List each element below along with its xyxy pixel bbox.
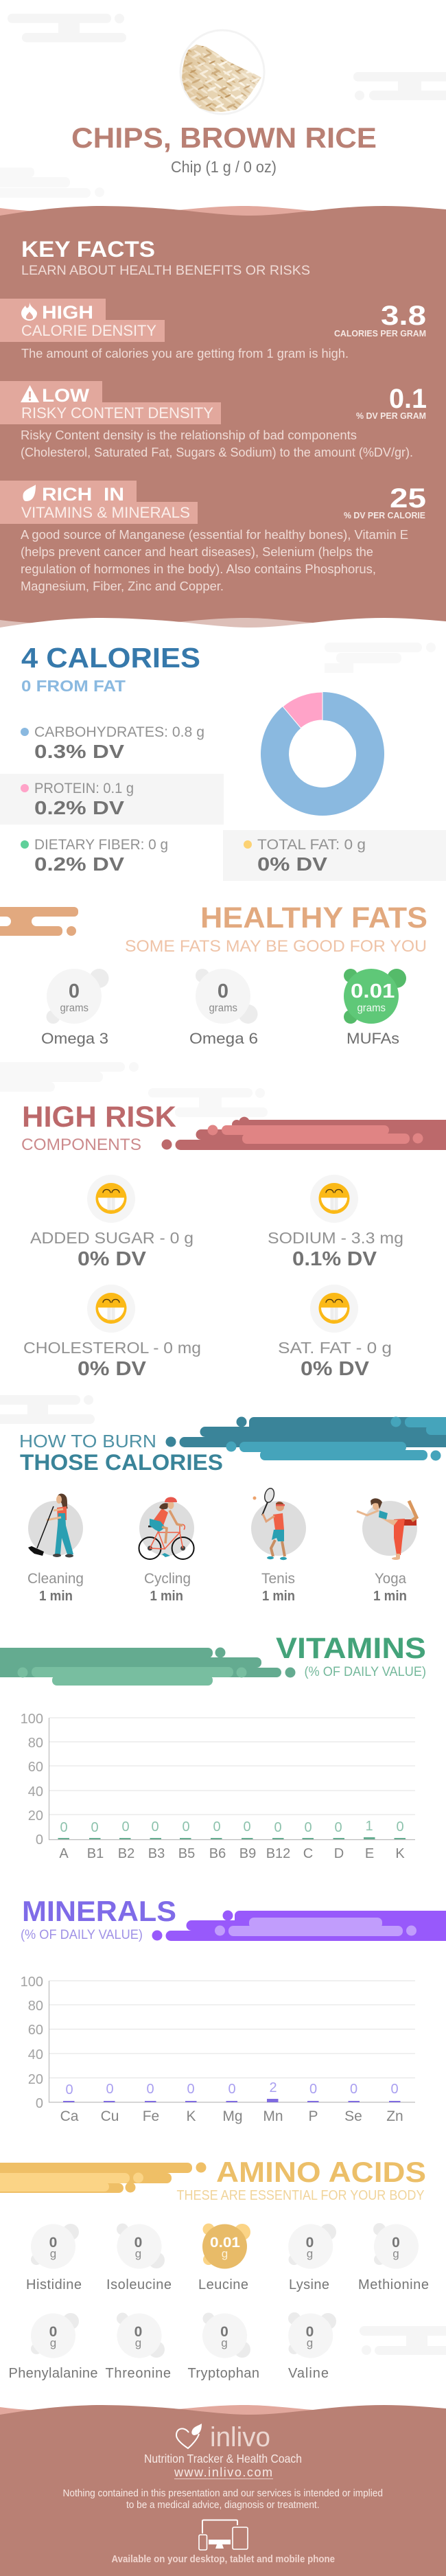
chart: minerals bar chart: Ca	[60, 2108, 79, 2124]
subheading: vitamins: (% OF DAILY VALUE)	[305, 1665, 426, 1679]
background cloud: top left	[8, 14, 126, 43]
icon: person playing tennis	[253, 1487, 287, 1560]
heading: amino acids: AMINO ACIDS	[216, 2156, 426, 2188]
background cloud: left of subtitle	[0, 168, 104, 198]
amino: valine: Valine	[288, 2366, 329, 2381]
amino: phenylalanine	[8, 2313, 97, 2381]
chart: minerals bar chart: 0	[228, 2082, 236, 2097]
amino: lysine: Lysine	[289, 2277, 329, 2292]
subheading: minerals: (% OF DAILY VALUE)	[21, 1928, 143, 1942]
icon: desktop, tablet and phone	[199, 2520, 248, 2550]
banner: healthy fats	[0, 907, 89, 936]
amino: threonine: 0	[134, 2324, 142, 2340]
chart: vitamins bar chart: 0	[213, 1819, 221, 1835]
stat: MUFAs	[344, 969, 406, 1047]
chart: vitamins bar chart: 0	[334, 1820, 342, 1835]
amino: isoleucine: Isoleucine	[106, 2277, 172, 2292]
chart: vitamins bar chart: K	[395, 1846, 405, 1861]
chart: vitamins bar chart: 0	[121, 1819, 130, 1835]
chart: vitamins bar chart: 1	[365, 1819, 373, 1834]
chart: minerals bar chart: 80	[28, 1999, 43, 2014]
legend: carbohydrates: 0.3% DV	[34, 741, 124, 762]
fact: rich in vitamins and minerals: A good source of Manganese (essential for healthy bones), Vitamin E	[21, 528, 408, 542]
stat: omega 6: grams	[209, 1002, 237, 1014]
amino: phenylalanine: Phenylalanine	[8, 2366, 97, 2381]
legend: protein: PROTEIN: 0.1 g	[34, 781, 134, 796]
amino: leucine: Leucine	[198, 2277, 248, 2292]
amino: valine: g	[307, 2336, 313, 2349]
fact: risky content density	[0, 381, 427, 459]
amino: tryptophan: g	[221, 2336, 228, 2349]
chart: minerals bar chart: Se	[344, 2108, 362, 2124]
chart: minerals bar chart: 0	[106, 2082, 114, 2097]
panel: footer background	[0, 2405, 446, 2576]
legend: carbohydrates	[21, 724, 204, 762]
amino: leucine: 0.01	[210, 2235, 240, 2251]
chart: minerals bar chart: Mn	[263, 2108, 283, 2124]
amino: threonine: g	[135, 2336, 141, 2349]
legend: dietary fiber: 0.2% DV	[34, 853, 124, 875]
chart: vitamins bar chart: D	[334, 1846, 344, 1861]
icon: grinning face	[318, 1183, 350, 1214]
stat: MUFAs: 0.01	[351, 980, 395, 1002]
icon: grinning face	[96, 1183, 126, 1214]
food photo: brown rice	[180, 30, 264, 114]
chart: vitamins bar chart: 0	[396, 1819, 404, 1835]
chart: minerals bar chart: 0	[309, 2082, 317, 2097]
legend panels	[0, 774, 446, 881]
amino: methionine	[358, 2223, 429, 2292]
heading: calories: 4 CALORIES	[21, 642, 200, 674]
amino: threonine: Threonine	[106, 2366, 171, 2381]
disclaimer: to be a medical advice, diagnosis or treatment.	[126, 2500, 320, 2511]
amino: lysine: 0	[306, 2235, 314, 2251]
heading: how to burn: HOW TO BURN	[19, 1431, 156, 1451]
heading: healthy fats: HEALTHY FATS	[200, 901, 427, 934]
risk item: added sugar: 0% DV	[78, 1248, 147, 1270]
legend: protein	[21, 781, 134, 818]
amino: leucine	[198, 2223, 250, 2292]
icon: grinning face	[318, 1293, 350, 1324]
chart: vitamins bar chart: B6	[209, 1846, 226, 1861]
icon: warning triangle	[21, 385, 39, 402]
activity: yoga	[357, 1498, 417, 1604]
risk item: sodium: 0.1% DV	[292, 1248, 377, 1270]
chart: vitamins bar chart: 0	[91, 1820, 99, 1835]
chart: vitamins bar chart: 0	[182, 1819, 190, 1835]
stat: omega 3: grams	[60, 1002, 89, 1014]
activity: tennis: 1 min	[262, 1589, 295, 1604]
chart: vitamins bar chart: B9	[239, 1846, 256, 1861]
amino: threonine	[106, 2312, 171, 2381]
banner: amino acids	[0, 2163, 206, 2193]
availability note: Available on your desktop, tablet and mobile phone	[111, 2554, 335, 2565]
fact: calorie density: 3.8	[381, 301, 426, 331]
amino: isoleucine: g	[135, 2247, 141, 2260]
activity: cycling	[139, 1497, 194, 1604]
fact: calorie density: CALORIE DENSITY	[21, 322, 156, 339]
chart: vitamins bar chart: 0	[60, 1820, 68, 1835]
banner: minerals	[152, 1910, 446, 1941]
stat: MUFAs: grams	[357, 1002, 386, 1014]
amino: isoleucine	[106, 2223, 172, 2292]
banner: vitamins	[0, 1648, 295, 1686]
chart: vitamins bar chart: 0	[36, 1832, 43, 1848]
legend: dietary fiber: DIETARY FIBER: 0 g	[34, 837, 168, 853]
serving size: Chip (1 g / 0 oz)	[171, 158, 277, 176]
panel: key facts background	[0, 206, 446, 642]
icon: flame	[21, 302, 37, 321]
subheading: components: COMPONENTS	[21, 1136, 141, 1154]
icon: leaf	[23, 485, 36, 501]
legend: protein: 0.2% DV	[34, 797, 124, 818]
heading: high risk: HIGH RISK	[22, 1101, 176, 1134]
chart: vitamins bar chart: B1	[87, 1846, 104, 1861]
amino: lysine	[288, 2224, 336, 2292]
chart: minerals bar chart: 0	[65, 2082, 73, 2097]
activity: tennis: Tenis	[261, 1571, 295, 1587]
fact: calorie density: HIGH	[42, 302, 93, 323]
chart: minerals bar chart: P	[308, 2108, 318, 2124]
amino: histidine: g	[50, 2247, 56, 2260]
chart: minerals bar chart: 0	[187, 2082, 195, 2097]
fact: rich in vitamins and minerals: VITAMINS & MINERALS	[21, 504, 190, 521]
fact: rich in vitamins and minerals: 25	[390, 483, 426, 514]
stat: omega 3: 0	[69, 980, 80, 1002]
legend: total fat	[244, 837, 366, 875]
chart: vitamins bar chart: B2	[118, 1846, 134, 1861]
chart: vitamins bar chart: C	[303, 1846, 313, 1861]
banner: burn calories	[166, 1417, 446, 1461]
activity: yoga: 1 min	[373, 1589, 407, 1604]
amino: methionine: g	[392, 2247, 399, 2260]
website link: www.inlivo.com	[174, 2465, 272, 2479]
title: CHIPS, BROWN RICE	[71, 122, 377, 154]
amino: phenylalanine: 0	[49, 2324, 57, 2340]
fact: risky content density: 0.1	[389, 384, 427, 414]
amino: phenylalanine: g	[50, 2336, 56, 2349]
disclaimer: Nothing contained in this presentation and our services is intended or implied	[63, 2488, 383, 2499]
chart: minerals bar chart: 2	[269, 2080, 277, 2095]
risk item: saturated fat: 0% DV	[301, 1358, 370, 1380]
subheading: key facts: LEARN ABOUT HEALTH BENEFITS OR RISKS	[21, 264, 310, 278]
chart: vitamins bar chart: B3	[148, 1846, 165, 1861]
amino: lysine: g	[307, 2247, 313, 2260]
activity: tennis	[251, 1487, 306, 1604]
icon: grinning face	[96, 1293, 126, 1324]
chart: minerals bar chart: 0	[146, 2082, 154, 2097]
fact: rich in vitamins and minerals	[0, 481, 426, 593]
fact: calorie density: CALORIES PER GRAM	[334, 328, 426, 338]
chart: minerals bar chart: Cu	[101, 2108, 119, 2124]
heading: those calories: THOSE CALORIES	[20, 1450, 223, 1475]
disclaimer	[63, 2488, 383, 2511]
chart: vitamins bar chart: 0	[304, 1820, 312, 1835]
chart: vitamins bar chart: 60	[28, 1760, 43, 1775]
chart: minerals bar chart: 0	[350, 2082, 357, 2097]
background cloud: top right	[353, 72, 446, 100]
amino: methionine: 0	[392, 2235, 400, 2251]
activity: cleaning: 1 min	[39, 1589, 73, 1604]
chart: vitamins bar chart: B12	[266, 1846, 290, 1861]
chart: minerals bar chart: Fe	[143, 2108, 159, 2124]
chart: minerals bar chart	[21, 1975, 415, 2124]
fact: rich in vitamins and minerals: (helps prevent cancer and heart diseases), Selenium (helps the	[21, 545, 373, 559]
chart: minerals bar chart: 20	[28, 2072, 43, 2087]
stat: omega 3	[41, 969, 108, 1047]
subheading: amino acids: THESE ARE ESSENTIAL FOR YOUR BODY	[177, 2188, 424, 2203]
icon: person in yoga pose	[357, 1498, 416, 1560]
risk item: cholesterol: 0% DV	[78, 1358, 147, 1380]
fact: risky content density: Risky Content density is the relationship of bad components	[21, 428, 357, 442]
risk item: added sugar: ADDED SUGAR - 0 g	[30, 1229, 193, 1247]
risk item: cholesterol: CHOLESTEROL - 0 mg	[23, 1339, 201, 1357]
legend: dietary fiber	[21, 837, 168, 875]
subheading: healthy fats: SOME FATS MAY BE GOOD FOR YOU	[125, 937, 427, 956]
amino: leucine: g	[222, 2247, 228, 2260]
stat: MUFAs: MUFAs	[347, 1030, 399, 1047]
chart: vitamins bar chart	[21, 1712, 415, 1861]
stat: omega 3: Omega 3	[41, 1030, 108, 1047]
risk item: saturated fat	[278, 1285, 392, 1380]
chart: vitamins bar chart: 100	[21, 1712, 43, 1727]
fact: rich in vitamins and minerals: Magnesium, Fiber, Zinc and Copper.	[21, 579, 224, 593]
logo: inlivo: inlivo	[210, 2422, 270, 2452]
risk item: added sugar	[30, 1175, 193, 1270]
chart: minerals bar chart: 0	[390, 2082, 399, 2097]
chart: minerals bar chart: 100	[21, 1975, 43, 1990]
amino: tryptophan: 0	[220, 2324, 228, 2340]
fact: calorie density	[0, 299, 426, 360]
chart: minerals bar chart: K	[186, 2108, 196, 2124]
background cloud: above high risk	[0, 1062, 268, 1117]
fact: risky content density: (Cholesterol, Saturated Fat, Sugars & Sodium) to the amount (%DV/gr).	[21, 446, 413, 459]
logo: inlivo	[176, 2422, 270, 2452]
activity: cycling: Cycling	[144, 1571, 191, 1587]
risk item: sodium	[268, 1175, 403, 1270]
amino: tryptophan: Tryptophan	[188, 2366, 259, 2381]
chart: calorie donut	[261, 692, 384, 816]
background cloud: calories	[325, 643, 436, 673]
heading: minerals: MINERALS	[22, 1895, 176, 1927]
activity: yoga: Yoga	[375, 1571, 406, 1587]
banner: high risk	[162, 1117, 446, 1150]
chart: vitamins bar chart: B5	[178, 1846, 195, 1861]
fact: rich in vitamins and minerals: % DV PER CALORIE	[344, 510, 425, 520]
chart: minerals bar chart: 60	[28, 2023, 43, 2038]
heading: key facts: KEY FACTS	[21, 237, 155, 262]
chart: minerals bar chart: 0	[36, 2096, 43, 2111]
icon: person cycling	[139, 1497, 194, 1559]
amino: histidine: Histidine	[26, 2277, 82, 2292]
amino: methionine: Methionine	[358, 2277, 429, 2292]
amino: histidine: 0	[49, 2235, 57, 2251]
chart: vitamins bar chart: 40	[28, 1784, 43, 1799]
fact: rich in vitamins and minerals: RICH IN	[42, 484, 124, 505]
chart: minerals bar chart: Mg	[222, 2108, 243, 2124]
risk item: saturated fat: SAT. FAT - 0 g	[278, 1339, 392, 1357]
background cloud: above burn section	[0, 1395, 95, 1424]
stat: omega 6	[189, 969, 258, 1047]
heading: vitamins: VITAMINS	[276, 1632, 426, 1665]
activity: cycling: 1 min	[150, 1589, 183, 1604]
risk item: cholesterol	[23, 1285, 201, 1380]
amino: histidine	[26, 2224, 82, 2292]
legend: total fat: 0% DV	[257, 853, 327, 875]
amino: valine: 0	[306, 2324, 314, 2340]
legend: carbohydrates: CARBOHYDRATES: 0.8 g	[34, 724, 204, 740]
icon: person sweeping	[28, 1493, 73, 1557]
chart: vitamins bar chart: 0	[243, 1819, 251, 1835]
tagline: Nutrition Tracker & Health Coach	[144, 2452, 302, 2465]
legend: total fat: TOTAL FAT: 0 g	[257, 837, 366, 853]
amino: valine	[288, 2312, 336, 2381]
fact: risky content density: RISKY CONTENT DENSITY	[21, 404, 213, 422]
stat: omega 6: Omega 6	[189, 1030, 258, 1047]
chart: vitamins bar chart: 0	[274, 1820, 282, 1835]
chart: vitamins bar chart: E	[365, 1846, 374, 1861]
chart: minerals bar chart: Zn	[386, 2108, 403, 2124]
amino: isoleucine: 0	[134, 2235, 142, 2251]
risk item: sodium: SODIUM - 3.3 mg	[268, 1229, 403, 1247]
chart: vitamins bar chart: A	[59, 1846, 69, 1861]
background cloud: right of amino acids	[360, 2326, 446, 2355]
fact: rich in vitamins and minerals: regulation of hormones in the body). Also contains Phosphorus,	[21, 562, 376, 576]
activity: cleaning	[27, 1493, 84, 1604]
subheading: calories from fat: 0 FROM FAT	[21, 677, 126, 695]
fact: calorie density: The amount of calories you are getting from 1 gram is high.	[21, 347, 349, 360]
fact: risky content density: % DV PER GRAM	[356, 411, 426, 421]
chart: vitamins bar chart: 20	[28, 1808, 43, 1824]
chart: vitamins bar chart: 0	[151, 1819, 159, 1835]
chart: minerals bar chart: 40	[28, 2047, 43, 2062]
amino: tryptophan	[188, 2312, 259, 2381]
activity: cleaning: Cleaning	[27, 1571, 84, 1587]
stat: omega 6: 0	[218, 980, 228, 1002]
chart: vitamins bar chart: 80	[28, 1736, 43, 1751]
fact: risky content density: LOW	[42, 385, 90, 406]
